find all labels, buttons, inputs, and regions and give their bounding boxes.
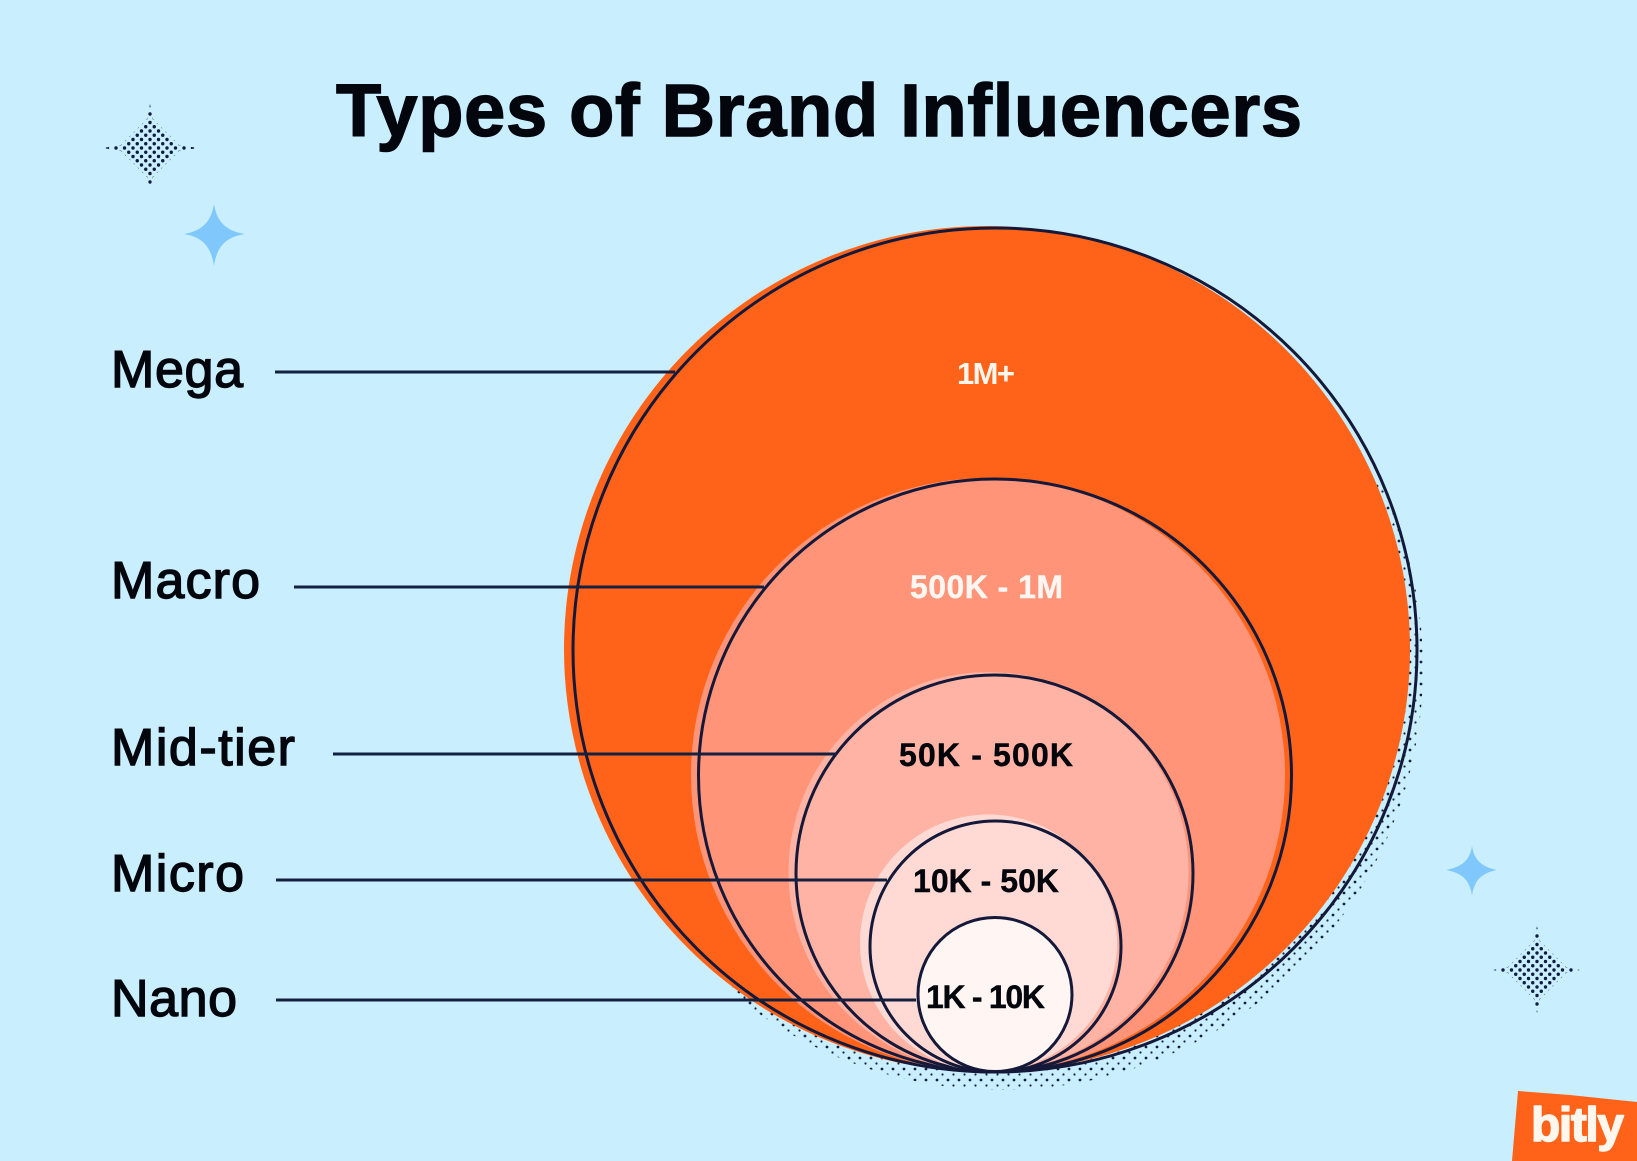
- circle: macro: [691, 478, 1292, 1072]
- logo: bitly tag: [1512, 1091, 1637, 1161]
- title: Types of Brand Influencers: [336, 69, 1302, 152]
- halftone shadow: [732, 484, 1422, 1090]
- leader line: mid-tier: [333, 752, 836, 756]
- circle: nano: [917, 918, 1072, 1072]
- value: 1M+: 1M+: [957, 356, 1015, 391]
- icon: dotted sparkle top left: [103, 104, 198, 189]
- leader line: micro: [276, 878, 887, 882]
- circle: mega: [564, 226, 1417, 1072]
- leader line: mega: [275, 370, 675, 374]
- icon: blue sparkle right: [1446, 846, 1497, 896]
- label: Mega: Mega: [111, 341, 243, 399]
- value: 10K - 50K: 10K - 50K: [913, 863, 1059, 899]
- logo: bitly tag: bitly: [1531, 1099, 1624, 1152]
- leader line: nano: [276, 998, 916, 1002]
- value: 1K - 10K: 1K - 10K: [926, 979, 1045, 1015]
- circle: micro: [860, 814, 1121, 1072]
- icon: dotted sparkle right: [1493, 926, 1580, 1013]
- value: 50K - 500K: 50K - 500K: [899, 737, 1073, 773]
- label: Micro: Micro: [111, 845, 244, 903]
- label: Macro: Macro: [111, 552, 260, 610]
- value: 500K - 1M: 500K - 1M: [910, 569, 1063, 605]
- label: Mid-tier: Mid-tier: [111, 719, 295, 777]
- leader line: macro: [294, 586, 764, 588]
- icon: blue sparkle top left: [184, 204, 245, 266]
- circle: mid-tier: [788, 672, 1193, 1072]
- label: Nano: Nano: [111, 970, 237, 1028]
- nested circles chart: [564, 226, 1417, 1072]
